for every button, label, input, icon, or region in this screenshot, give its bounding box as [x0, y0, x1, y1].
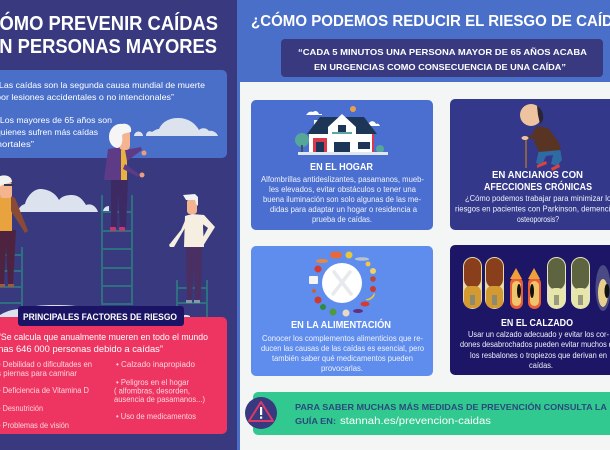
- list: right factors: [114, 360, 205, 421]
- text block: leading cause: [0, 80, 205, 102]
- text block: nutrition: provocarlas.: [321, 364, 363, 373]
- icon: brown shoes: [463, 257, 504, 309]
- text block: leading cause: por lesiones accidentales o no intencionales”: [0, 92, 174, 102]
- panel: chronic conditions: [450, 99, 610, 230]
- illustration: woman on ladder: [104, 124, 146, 231]
- heading: risk factors: [18, 306, 184, 326]
- callout: every 5 minutes: EN URGENCIAS COMO CONSECUENCIA DE UNA CAÍDA”: [314, 62, 566, 72]
- text block: at home: prueba de caídas.: [312, 215, 372, 224]
- panel: risk factors: [0, 306, 227, 434]
- panel: footwear: [450, 245, 610, 375]
- text block: footwear: caídas.: [529, 361, 553, 370]
- icon: upper clouds: [134, 118, 218, 136]
- callout: every 5 minutes: [281, 39, 603, 77]
- text block: nutrition: ducen las causas de las caídas es esencial, pero: [261, 344, 425, 353]
- icon: orange flats: [510, 268, 541, 309]
- icon: lower cloud: [0, 305, 190, 319]
- heading: chronic conditions: AFECCIONES CRÓNICAS: [484, 180, 592, 193]
- text block: at home: buena iluminación son solo algunas de las me-: [263, 195, 421, 204]
- text block: at home: Alfombrillas antideslizantes, pasamanos, mueb-: [261, 175, 424, 184]
- icon: middle cloud: [17, 189, 109, 212]
- heading: chronic conditions: [484, 170, 592, 193]
- list: right factors: • Peligros en el hogar: [116, 378, 189, 387]
- panel: guide banner: [245, 392, 610, 435]
- text block: annual deaths: [0, 332, 208, 354]
- text block: footwear: [460, 330, 610, 370]
- text block: chronic conditions: [455, 194, 610, 224]
- illustration: ladder centre: [102, 195, 132, 305]
- text block: nutrition: [261, 334, 425, 373]
- text block: nutrition: también saber qué medicamentos pueden: [272, 354, 413, 363]
- text block: nutrition: Conocer los complementos alimenticios que re-: [262, 334, 423, 343]
- text block: at home: [261, 175, 424, 224]
- text block: chronic conditions: osteoporosis?: [517, 215, 559, 224]
- text block: over 65: “Los mayores de 65 años son: [0, 115, 112, 125]
- text block: annual deaths: “Se calcula que anualmente mueren en todo el mundo: [0, 332, 208, 342]
- text block: at home: didas para adaptar un hogar o residencia a: [270, 205, 418, 214]
- list: right factors: ausencia de pasamanos...): [114, 395, 205, 404]
- list: right factors: ( alfombras, desorden,: [114, 386, 190, 396]
- icon: elderly man with cane: [520, 104, 562, 171]
- list: left factors: • Debilidad o dificultades en: [0, 360, 92, 369]
- icon: plate with food ring: [309, 252, 376, 316]
- text block: over 65: [0, 115, 112, 149]
- text block: guide link: PARA SABER MUCHAS MÁS MEDIDAS DE PREVENCIÓN CONSULTA LA: [295, 401, 607, 412]
- panel: nutrition: [251, 246, 433, 376]
- list: left factors: • Deficiencia de Vitamina D: [0, 386, 89, 395]
- callout: every 5 minutes: “CADA 5 MINUTOS UNA PERSONA MAYOR DE 65 AÑOS ACABA: [298, 47, 587, 57]
- title: [0, 11, 218, 58]
- illustration: ladder right: [177, 280, 207, 318]
- icon: olive shoes: [547, 257, 590, 309]
- illustration: man on left ladder: [0, 175, 28, 287]
- icon: navy heels: [596, 265, 610, 311]
- list: left factors: [0, 360, 92, 430]
- list: right factors: • Calzado inapropiado: [116, 360, 196, 369]
- text block: leading cause: “Las caídas son la segunda causa mundial de muerte: [0, 80, 205, 90]
- heading: risk factors: PRINCIPALES FACTORES DE RIESGO: [23, 312, 177, 323]
- heading: nutrition: EN LA ALIMENTACIÓN: [291, 318, 391, 331]
- panel: statistics callout: [0, 70, 227, 158]
- illustration: ladder left: [0, 247, 22, 306]
- heading: chronic conditions: EN ANCIANOS CON: [492, 170, 583, 181]
- icon: warning: [245, 397, 277, 429]
- list: left factors: • Problemas de visión: [0, 421, 69, 430]
- panel: right header band: [240, 0, 610, 82]
- text block: guide link: GUÍA EN:: [295, 416, 336, 426]
- heading: at home: EN EL HOGAR: [310, 162, 374, 173]
- illustration: man on right ladder: [169, 194, 215, 303]
- panel: left column: [0, 0, 240, 450]
- text block: guide link: stannah.es/prevencion-caidas: [340, 416, 491, 427]
- heading: footwear: EN EL CALZADO: [501, 318, 573, 329]
- list: right factors: • Uso de medicamentos: [116, 412, 196, 421]
- text block: at home: les elevados, evitar obstáculos o tener una: [269, 185, 417, 194]
- panel: at home: [251, 100, 433, 230]
- text block: guide link: [295, 401, 607, 427]
- icon: house: [295, 106, 388, 155]
